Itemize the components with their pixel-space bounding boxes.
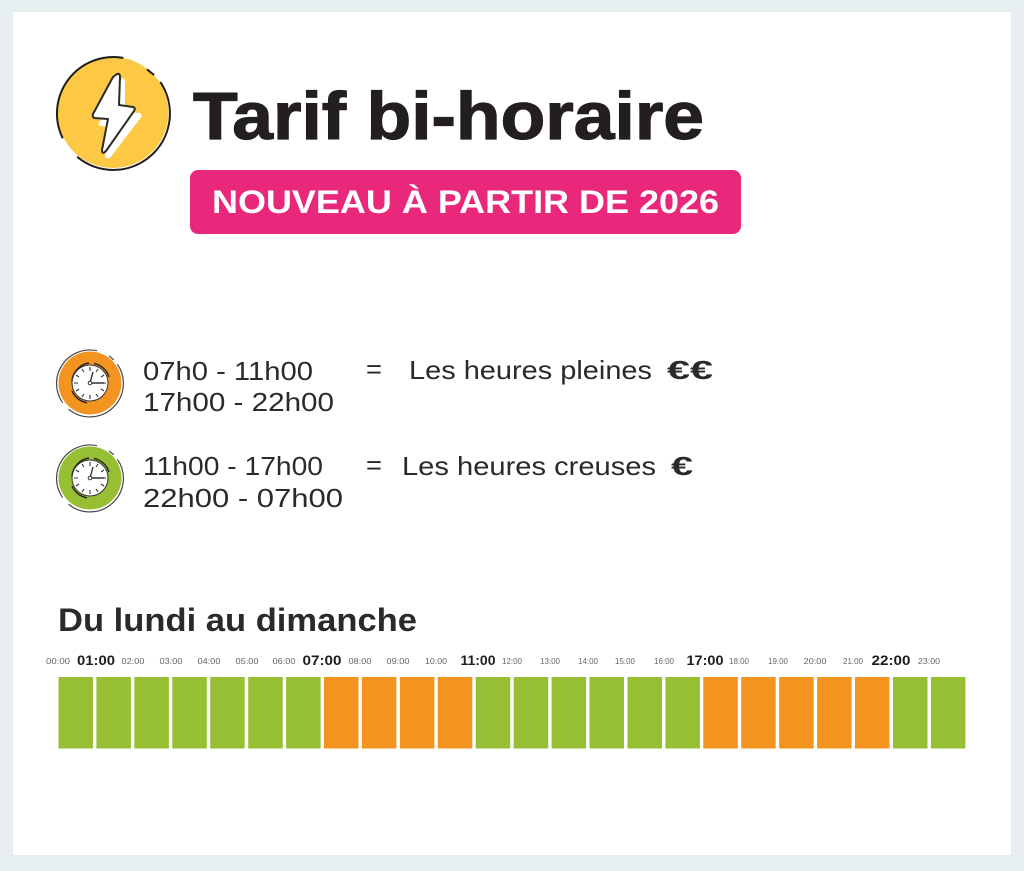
hour labels: 05:00 bbox=[236, 657, 259, 666]
hour labels: 03:00 bbox=[160, 657, 183, 666]
timeline bars: 24 hours bbox=[58, 677, 965, 748]
hour labels: 01:00 bbox=[77, 652, 115, 668]
text: off-peak hours schedule: 11h00 - 17h00 bbox=[143, 451, 323, 481]
hour labels bbox=[46, 652, 941, 668]
text: peak hours label: Les heures pleines bbox=[409, 355, 652, 385]
hour labels: 15:00 bbox=[615, 657, 636, 666]
hour labels: 19:00 bbox=[768, 657, 789, 666]
hour labels: 18:00 bbox=[729, 657, 750, 666]
title: Tarif bi-horaire bbox=[193, 79, 704, 154]
hour labels: 11:00 bbox=[460, 652, 496, 668]
hour labels: 23:00 bbox=[918, 657, 941, 666]
hour labels: 04:00 bbox=[198, 657, 221, 666]
text: off-peak hours label: € bbox=[671, 451, 693, 481]
hour labels: 07:00 bbox=[302, 652, 342, 668]
hour labels: 08:00 bbox=[348, 657, 372, 666]
hour labels: 14:00 bbox=[578, 657, 599, 666]
text: off-peak hours label: Les heures creuses bbox=[402, 451, 656, 481]
text: peak hours label: = bbox=[366, 354, 382, 384]
hour labels: 02:00 bbox=[122, 657, 145, 666]
hour labels: 10:00 bbox=[425, 657, 448, 666]
badge: new from 2026: NOUVEAU À PARTIR DE 2026 bbox=[212, 184, 719, 220]
text: off-peak hours label bbox=[366, 450, 693, 481]
text: off-peak hours label: = bbox=[366, 450, 382, 480]
text: peak hours label bbox=[366, 354, 713, 385]
text: peak hours schedule: 07h0 - 11h00 bbox=[143, 356, 313, 386]
text: off-peak hours schedule: 22h00 - 07h00 bbox=[143, 483, 343, 513]
text: peak hours label: €€ bbox=[667, 355, 713, 385]
icon: orange clock bbox=[57, 350, 123, 417]
hour labels: 21:00 bbox=[843, 657, 864, 666]
icon: lightning bolt bbox=[57, 57, 170, 170]
hour labels: 12:00 bbox=[502, 657, 523, 666]
hour labels: 13:00 bbox=[540, 657, 561, 666]
hour labels: 09:00 bbox=[386, 657, 410, 666]
hour labels: 16:00 bbox=[654, 657, 675, 666]
hour labels: 00:00 bbox=[46, 657, 71, 666]
text: peak hours schedule: 17h00 - 22h00 bbox=[143, 387, 334, 417]
badge: new from 2026 bbox=[190, 170, 741, 234]
hour labels: 06:00 bbox=[272, 657, 296, 666]
hour labels: 20:00 bbox=[804, 657, 827, 666]
hour labels: 22:00 bbox=[872, 652, 911, 668]
heading: every day: Du lundi au dimanche bbox=[58, 602, 417, 638]
icon: green clock bbox=[57, 445, 123, 512]
text: peak hours schedule bbox=[143, 356, 334, 417]
text: off-peak hours schedule bbox=[143, 451, 343, 513]
hour labels: 17:00 bbox=[686, 652, 724, 668]
